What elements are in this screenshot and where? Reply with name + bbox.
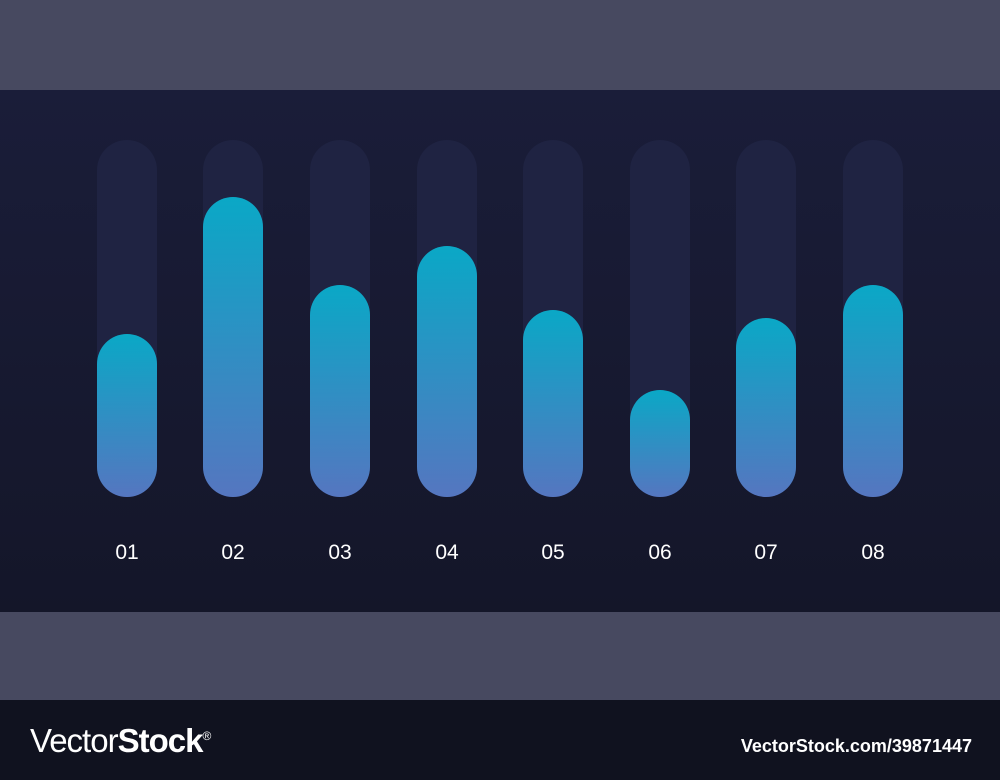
- label 02: 02: [221, 541, 245, 564]
- footer: [0, 700, 1000, 780]
- bar 01: [97, 140, 157, 497]
- label 06: 06: [648, 541, 672, 564]
- bar 05: [523, 140, 583, 497]
- panel: bar chart: [0, 90, 1000, 612]
- bar 08: [843, 140, 903, 497]
- bar 03: [310, 140, 370, 497]
- bottom band: [0, 612, 1000, 700]
- label 08: 08: [861, 541, 885, 564]
- label 01: 01: [115, 541, 139, 564]
- bar 02: [203, 140, 263, 497]
- bar 07: [736, 140, 796, 497]
- label 04: 04: [435, 541, 459, 564]
- label 07: 07: [754, 541, 778, 564]
- bar 04: [417, 140, 477, 497]
- top band: [0, 0, 1000, 90]
- logo: VectorStock®: [30, 722, 210, 759]
- label 03: 03: [328, 541, 352, 564]
- bar 06: [630, 140, 690, 497]
- label 05: 05: [541, 541, 565, 564]
- image id: VectorStock.com/39871447: [741, 736, 972, 756]
